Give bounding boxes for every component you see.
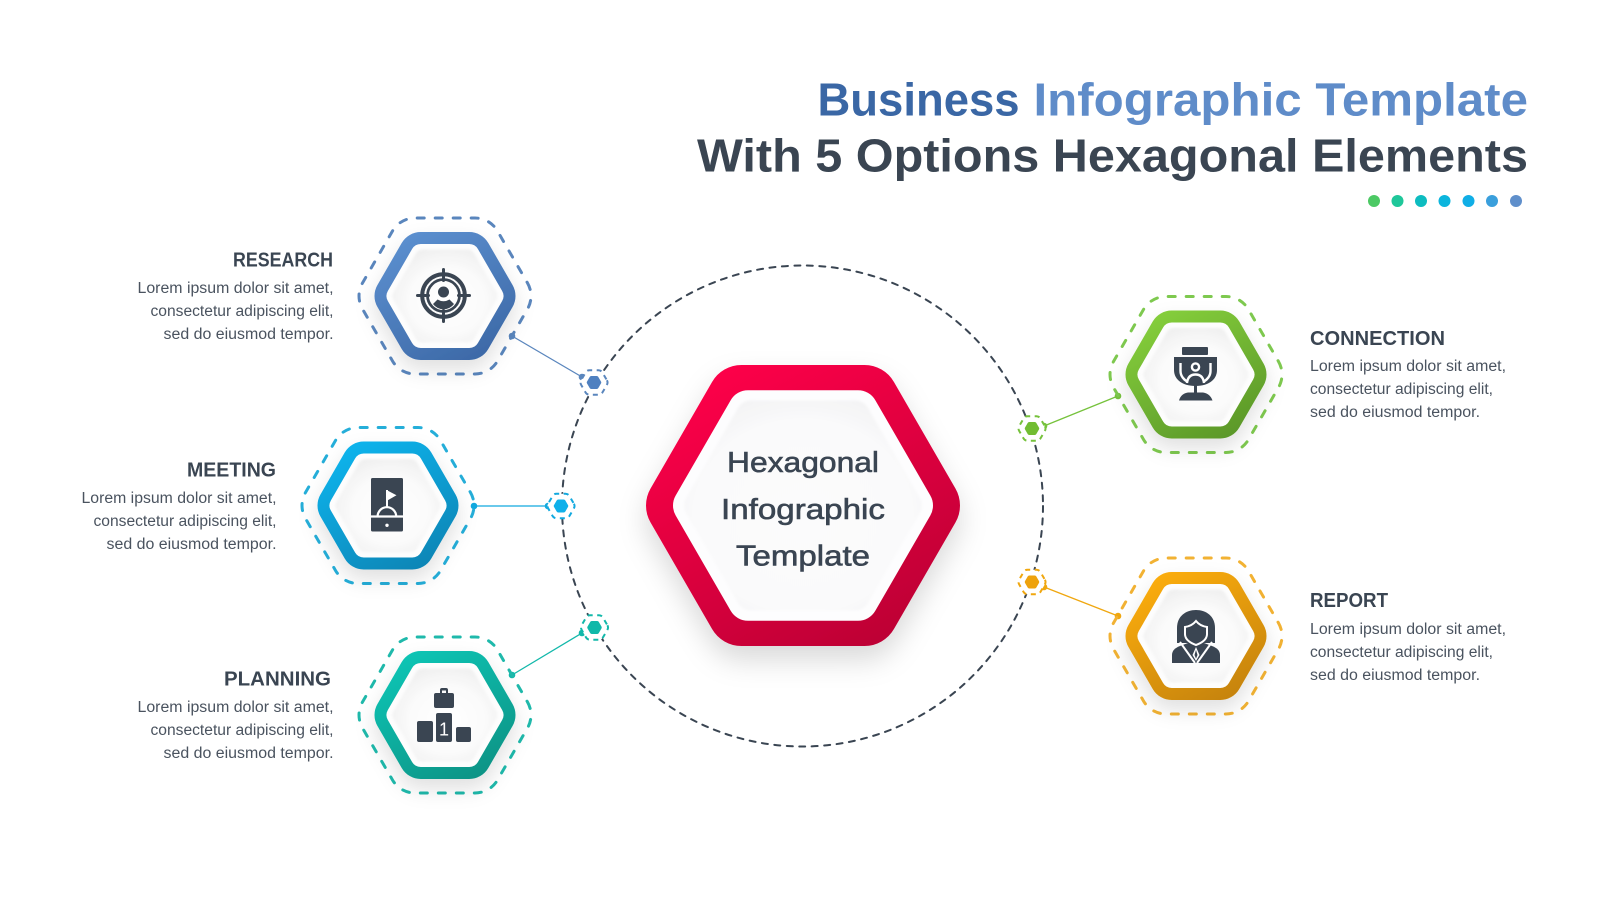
text: meeting: Lorem ipsum dolor sit amet, — [82, 490, 276, 507]
central hexagon text: Infographic — [721, 494, 885, 526]
panel: connection hexagon — [1110, 296, 1282, 452]
connector: report — [1041, 584, 1121, 619]
text: report: Lorem ipsum dolor sit amet, — [1310, 621, 1506, 638]
panel: planning hexagon — [359, 637, 531, 793]
text: meeting: sed do eiusmod tempor. — [106, 536, 276, 553]
text: meeting — [82, 460, 276, 553]
text: meeting: consectetur adipiscing elit, — [94, 513, 276, 530]
decorative dot row — [1368, 195, 1522, 207]
connector: planning — [509, 630, 585, 678]
title: Infographic Template — [1034, 74, 1528, 126]
title — [697, 74, 1528, 182]
central hexagon text — [721, 447, 885, 572]
text: planning: PLANNING — [224, 668, 331, 690]
panel: meeting hexagon — [302, 428, 474, 584]
dashed orbit circle — [562, 266, 1043, 746]
text: research: sed do eiusmod tempor. — [164, 326, 334, 343]
text: research: Lorem ipsum dolor sit amet, — [138, 280, 334, 297]
text: research: RESEARCH — [233, 250, 333, 272]
title: With 5 Options Hexagonal Elements — [697, 130, 1528, 182]
connector: research — [509, 333, 585, 380]
icon: target person — [418, 270, 470, 322]
node: report — [1018, 570, 1046, 594]
central hexagon — [646, 365, 960, 646]
text: report: sed do eiusmod tempor. — [1310, 667, 1480, 684]
text: report: REPORT — [1310, 590, 1388, 612]
text: report: consectetur adipiscing elit, — [1310, 644, 1493, 661]
text: planning: Lorem ipsum dolor sit amet, — [138, 699, 334, 716]
text: connection: sed do eiusmod tempor. — [1310, 404, 1480, 421]
text: planning: consectetur adipiscing elit, — [150, 722, 334, 739]
node: connection — [1018, 416, 1046, 441]
icon: mobile with flag — [371, 478, 403, 532]
text: connection — [1310, 328, 1506, 421]
text: research — [138, 250, 334, 343]
node: meeting — [547, 494, 575, 518]
panel: research hexagon — [359, 218, 531, 374]
text: meeting: MEETING — [187, 460, 276, 482]
text: planning — [138, 668, 334, 762]
panel: report hexagon — [1110, 558, 1282, 714]
central hexagon text: Template — [736, 540, 870, 572]
icon: video call trophy — [1174, 347, 1217, 400]
text: report — [1310, 590, 1506, 684]
icon: podium with briefcase — [417, 688, 471, 742]
node: research — [580, 370, 608, 395]
node: planning — [581, 615, 608, 640]
title: Business — [818, 74, 1020, 126]
connector: connection — [1041, 393, 1121, 429]
icon: podium with briefcase: 1 — [439, 720, 449, 740]
text: connection: CONNECTION — [1310, 328, 1445, 350]
text: research: consectetur adipiscing elit, — [150, 303, 334, 320]
icon: businesswoman — [1172, 610, 1220, 663]
connector: meeting — [471, 503, 551, 509]
central hexagon text: Hexagonal — [727, 447, 879, 479]
text: connection: consectetur adipiscing elit, — [1310, 381, 1493, 398]
text: planning: sed do eiusmod tempor. — [164, 745, 334, 762]
text: connection: Lorem ipsum dolor sit amet, — [1310, 358, 1506, 375]
